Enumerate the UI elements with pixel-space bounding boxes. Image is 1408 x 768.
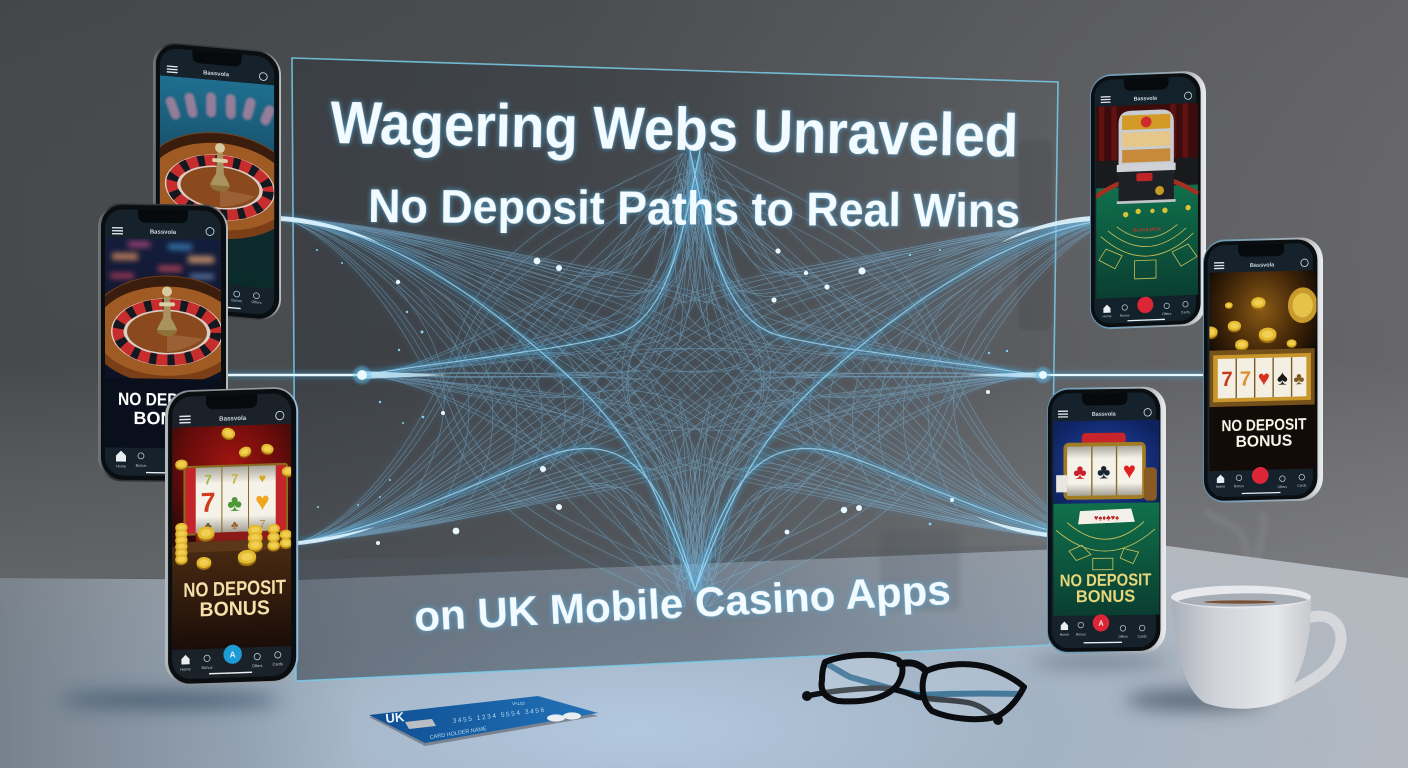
betting table bbox=[1056, 521, 1155, 570]
phone: top-right blackjack: Bonus bbox=[1120, 313, 1130, 318]
phone nav bbox=[217, 289, 262, 311]
phone: bottom-right cards and table: A bbox=[1098, 619, 1104, 628]
icon: eyeglasses bbox=[802, 655, 1024, 725]
phone: right gold slots: Offers bbox=[1278, 485, 1287, 489]
phone bonus text: NO DEPOSIT bbox=[1060, 570, 1152, 590]
glowing nodes bbox=[316, 248, 1051, 545]
slot reels: 7 bbox=[231, 471, 238, 487]
phone bonus text: NO DEPOSIT bbox=[1221, 416, 1307, 435]
icon: credit card: 3455 1234 5554 3456 bbox=[452, 707, 545, 725]
icon: coffee steam bbox=[1205, 510, 1264, 590]
slot reels: ♥ bbox=[255, 487, 270, 516]
slot cabinet bbox=[1117, 109, 1176, 204]
phone: middle-left roulette: Home bbox=[116, 464, 126, 469]
phone: bottom-right cards and table bbox=[1047, 386, 1166, 654]
phone: top-right blackjack bbox=[1090, 70, 1206, 330]
slot reels bbox=[1056, 432, 1157, 502]
phone header bbox=[167, 48, 267, 82]
phone nav: Offers bbox=[251, 300, 262, 305]
phone: top-right blackjack: Offers bbox=[1162, 312, 1172, 316]
phone: top-right blackjack: Home bbox=[1102, 314, 1112, 318]
phone: top-right blackjack: Bassvola bbox=[1134, 96, 1158, 103]
phone: top-right blackjack: BLACKJACK bbox=[1133, 226, 1162, 233]
phone: right gold slots: Bassvola bbox=[1250, 262, 1275, 269]
phone: bottom-right cards and table: Cards bbox=[1138, 634, 1147, 639]
slot reels: ♥ bbox=[259, 471, 266, 486]
title: Wagering Webs Unraveled: Wagering Webs Unraveled bbox=[330, 89, 1019, 170]
phone: right gold slots bbox=[1203, 237, 1323, 503]
phone: bottom-left slot machine: Bassvola bbox=[219, 415, 247, 423]
phone: bottom-right cards and table: Bonus bbox=[1076, 632, 1086, 637]
phone bonus text: NO DEPOSIT bbox=[183, 576, 286, 602]
slot reels: ♣ bbox=[1294, 369, 1304, 388]
gold coins bbox=[175, 424, 294, 571]
phone: right gold slots: BONUS bbox=[1236, 432, 1292, 451]
slot reels: 7 bbox=[259, 519, 266, 531]
betting table bbox=[1099, 224, 1197, 280]
phone: bottom-left slot machine: Home bbox=[180, 666, 191, 672]
phone: right gold slots: Home bbox=[1216, 485, 1225, 489]
phone: bottom-left slot machine: A bbox=[230, 649, 236, 660]
slot reels: 7 bbox=[201, 487, 215, 518]
web fine strands bbox=[283, 150, 1119, 607]
phone: top-left roulette bbox=[153, 43, 282, 320]
icon: credit card bbox=[369, 696, 598, 746]
phone: bottom-right cards and table: Offers bbox=[1118, 635, 1128, 639]
glass panel bbox=[292, 58, 1058, 681]
slot reels: ♥ bbox=[1123, 458, 1136, 483]
web soft glow bbox=[283, 150, 1119, 607]
bright entry strands bbox=[228, 150, 1204, 590]
slot reels: ♣ bbox=[1097, 460, 1110, 484]
table shadows bbox=[60, 657, 1265, 710]
slot reels bbox=[181, 463, 290, 553]
subtitle: No Deposit Paths to Real Wins: No Deposit Paths to Real Wins bbox=[368, 179, 1020, 237]
slot reels: 7 bbox=[204, 472, 212, 488]
playing cards bbox=[1078, 508, 1135, 524]
icon: credit card: UK bbox=[385, 709, 406, 726]
slot reels: ♣ bbox=[204, 520, 212, 533]
icon: credit card: VALID bbox=[512, 701, 525, 706]
slot reels: ♣ bbox=[1073, 460, 1087, 484]
phone: bottom-right cards and table: Bassvola bbox=[1092, 412, 1117, 418]
icon: credit card: CARD HOLDER NAME bbox=[429, 726, 487, 741]
gold coins bbox=[1203, 287, 1317, 352]
phone: top-right blackjack: Cards bbox=[1181, 310, 1190, 315]
slot reels: ♠ bbox=[1277, 366, 1288, 390]
phone: middle-left roulette: Bassvola bbox=[150, 230, 177, 236]
phone nav: Bonus bbox=[231, 298, 242, 303]
phone: bottom-left slot machine: Offers bbox=[252, 663, 263, 668]
icon: coffee cup bbox=[1171, 586, 1341, 709]
phone: middle-left roulette: BONUS bbox=[134, 408, 199, 429]
phone: bottom-left slot machine: BONUS bbox=[200, 597, 270, 621]
slot reels: 7 bbox=[1221, 368, 1233, 391]
phone header: Bassvola bbox=[203, 70, 230, 79]
phone: bottom-left slot machine: Bonus bbox=[202, 665, 213, 670]
slot reels bbox=[1208, 348, 1315, 407]
phone: middle-left roulette: Bonus bbox=[136, 464, 146, 468]
slot reels: ♣ bbox=[231, 520, 239, 532]
caption: on UK Mobile Casino Apps: on UK Mobile Casino Apps bbox=[413, 566, 952, 640]
phone: middle-left roulette bbox=[98, 204, 228, 482]
phone: right gold slots: Bonus bbox=[1234, 484, 1244, 488]
phone: bottom-left slot machine bbox=[165, 386, 298, 686]
phone: right gold slots: Cards bbox=[1297, 483, 1307, 488]
phone: bottom-right cards and table: Home bbox=[1060, 633, 1069, 637]
phone bonus text: NO DEPOSIT bbox=[118, 389, 214, 410]
table surface bbox=[0, 545, 1408, 768]
slot reels: 7 bbox=[1240, 367, 1251, 391]
network web of wagering paths bbox=[228, 150, 1204, 607]
phone: bottom-right cards and table: BONUS bbox=[1076, 586, 1135, 606]
slot reels: ♣ bbox=[227, 489, 242, 516]
phone: bottom-left slot machine: Cards bbox=[273, 661, 283, 667]
slot reels: ♥ bbox=[1258, 367, 1270, 390]
playing cards: ♥♠♦♣♥♠ bbox=[1094, 513, 1119, 522]
